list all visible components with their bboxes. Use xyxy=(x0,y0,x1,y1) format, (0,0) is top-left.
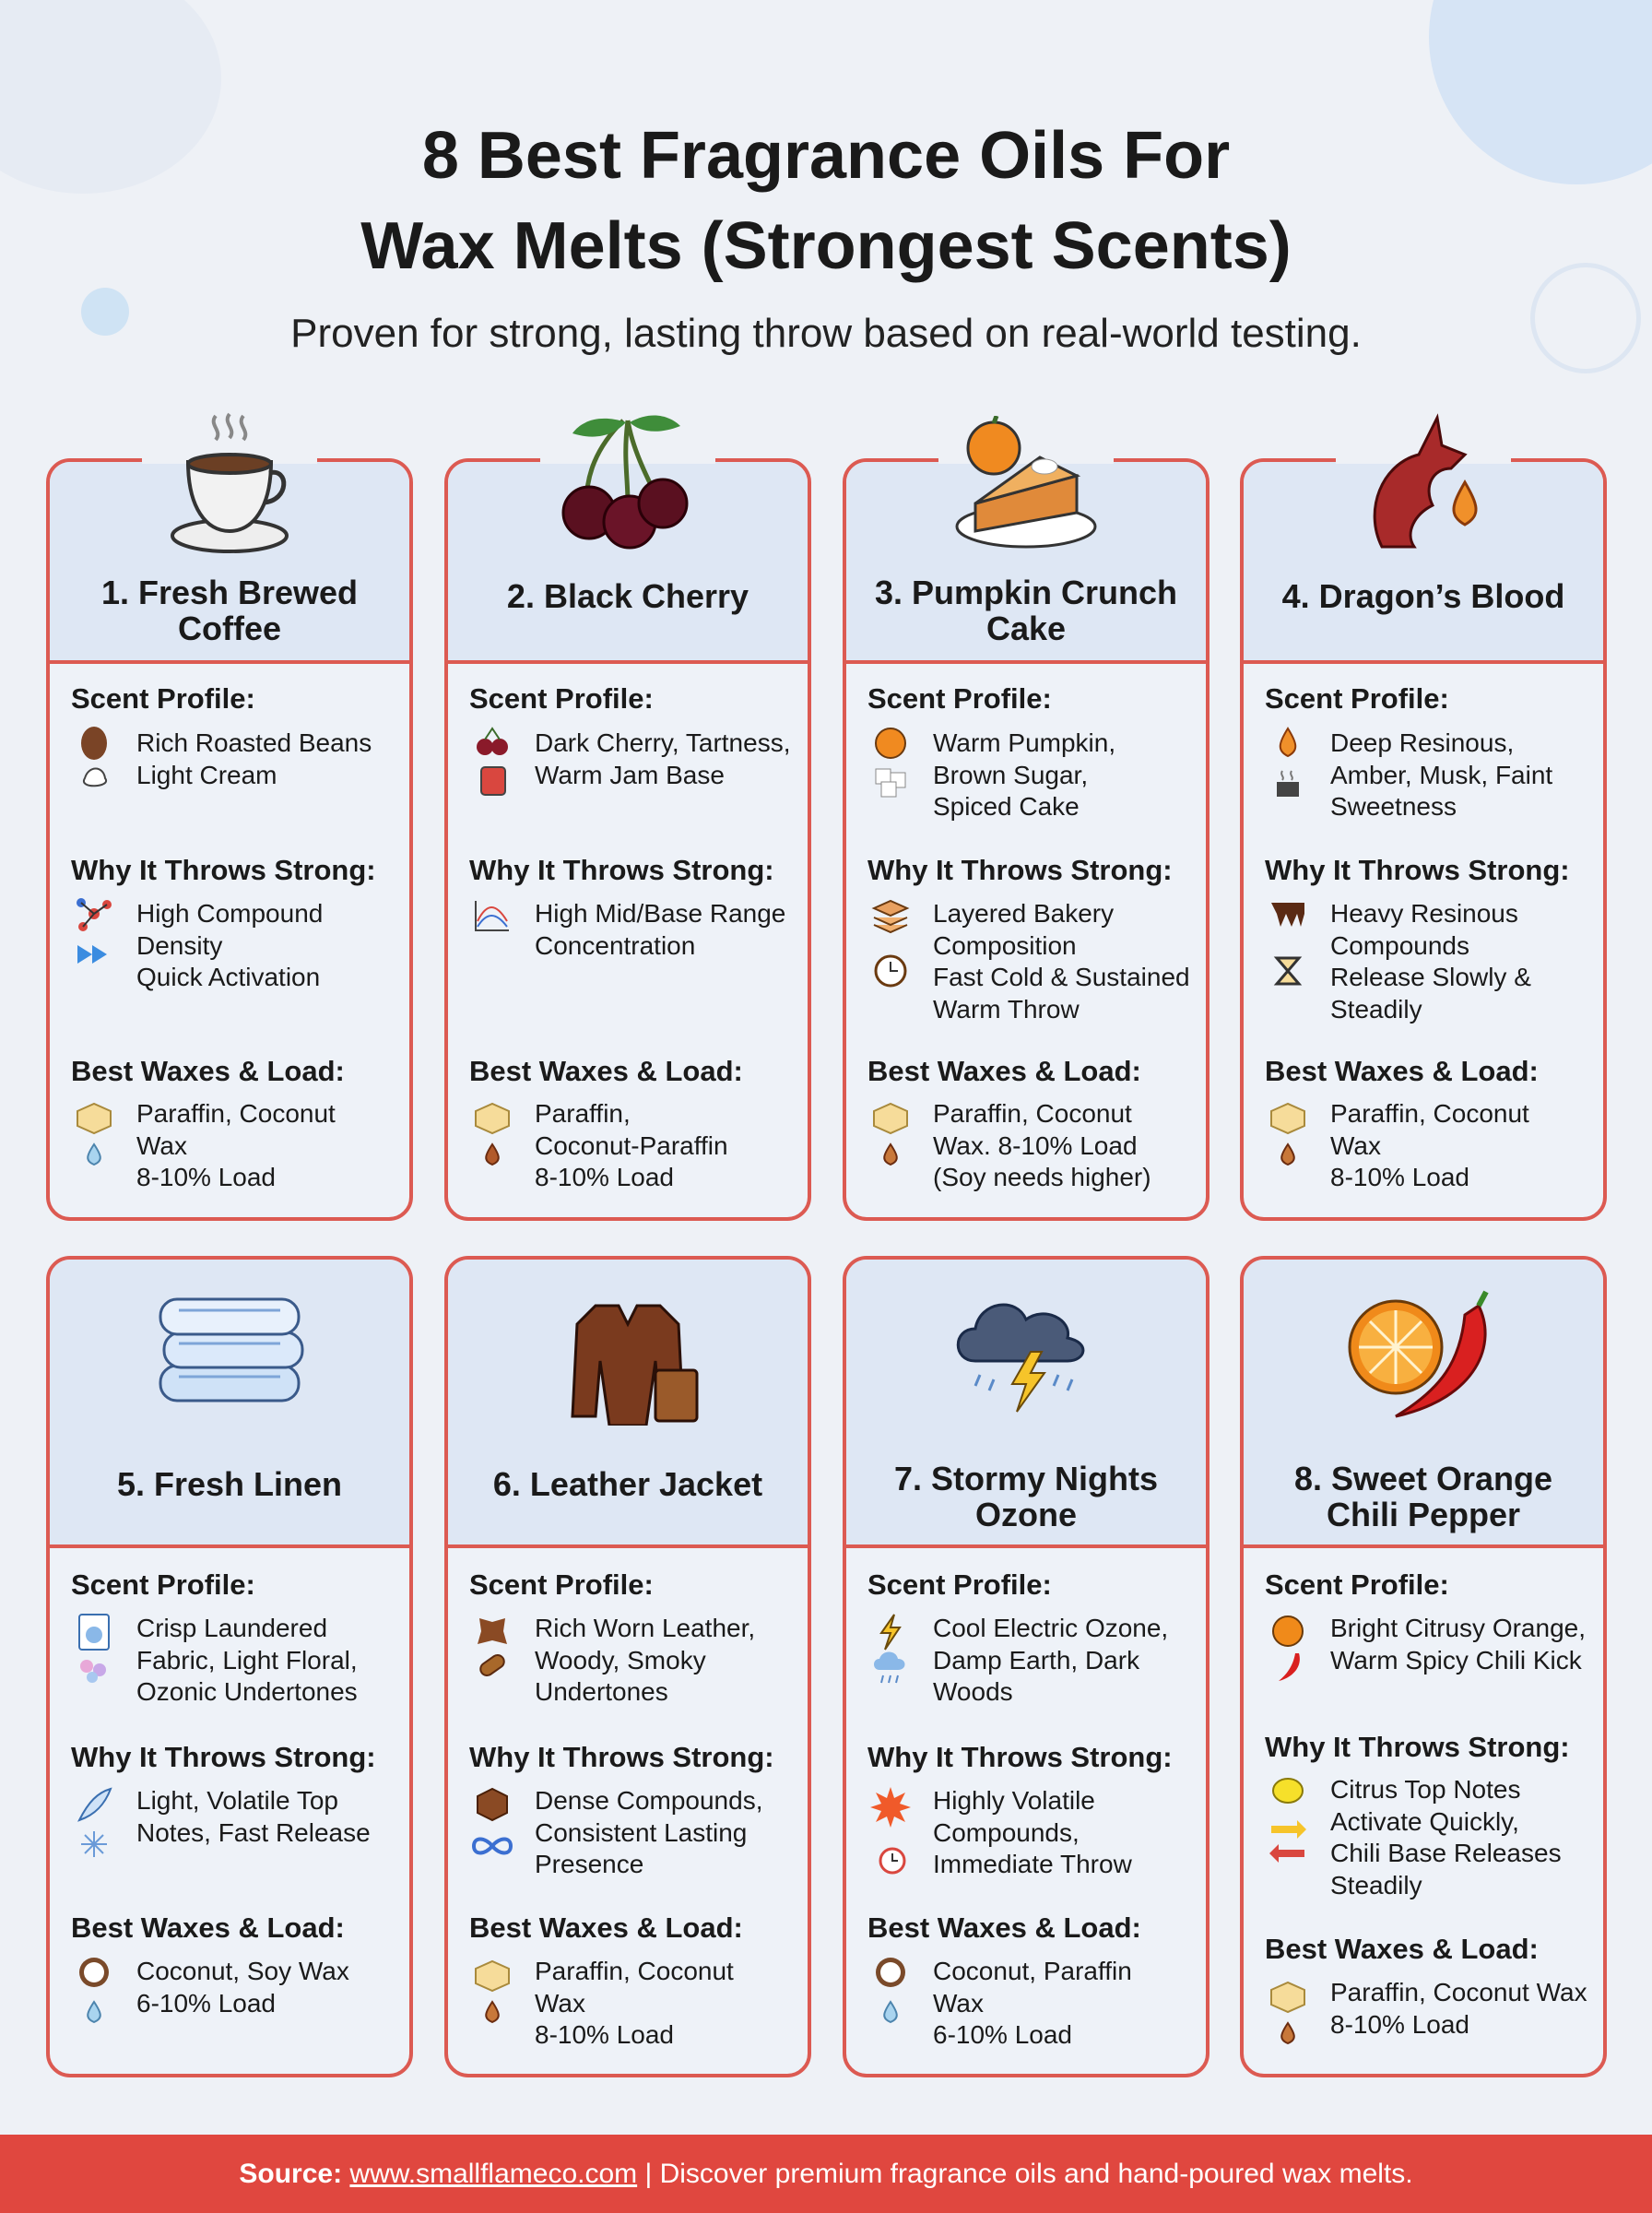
why it throws: Why It Throws Strong: xyxy=(1265,1731,1570,1763)
card 2: black cherry: Coconut-Paraffin xyxy=(535,1130,728,1160)
card 6: leather jacket: Undertones xyxy=(535,1677,668,1706)
title: Cake xyxy=(986,609,1066,647)
icon: cherries xyxy=(562,415,688,550)
card 7: stormy nights: Immediate Throw xyxy=(933,1850,1132,1878)
icon: storm cloud xyxy=(957,1304,1084,1413)
card 1: coffee: Quick Activation xyxy=(136,963,320,991)
why it throws: Why It Throws Strong: xyxy=(1265,854,1570,886)
footer source bar: Source: www.smallflameco.com | Discover premium fragrance oils and hand-poured wax melts. xyxy=(239,2159,1413,2189)
why it throws: Why It Throws Strong: xyxy=(469,854,774,886)
best waxes: Best Waxes & Load: xyxy=(867,1055,1141,1087)
footer source bar xyxy=(0,2135,1652,2213)
card 7: stormy nights: Woods xyxy=(933,1677,1013,1706)
card 4: dragon's blood: Compounds xyxy=(1330,931,1469,959)
card 4: dragon's blood: Steadily xyxy=(1330,994,1422,1024)
icon: leather jacket xyxy=(571,1304,699,1426)
card 4: dragon's blood: Deep Resinous, xyxy=(1330,728,1514,757)
card 3: pumpkin xyxy=(843,458,1210,1221)
card 8: sweet orange chili pepper: Bright Citrusy Orange, xyxy=(1330,1614,1586,1642)
card 1: coffee: Light Cream xyxy=(136,760,277,789)
card 5: fresh linen: Ozonic Undertones xyxy=(136,1677,358,1706)
scent profile: Scent Profile: xyxy=(469,1568,654,1601)
title: 5. Fresh Linen xyxy=(117,1465,342,1503)
card 1: coffee: Paraffin, Coconut xyxy=(136,1099,336,1128)
card 2: black cherry: Dark Cherry, Tartness, xyxy=(535,728,790,757)
why it throws: Why It Throws Strong: xyxy=(71,854,376,886)
scent profile: Scent Profile: xyxy=(1265,1568,1449,1601)
card 3: pumpkin: Warm Throw xyxy=(933,994,1080,1024)
title: 2. Black Cherry xyxy=(507,577,749,615)
title xyxy=(894,1460,1158,1533)
scent profile: Scent Profile: xyxy=(867,1568,1052,1601)
card 8: sweet orange chili pepper: Activate Quickly, xyxy=(1330,1807,1519,1835)
card 3: pumpkin: Warm Pumpkin, xyxy=(933,728,1115,757)
card 1: coffee: Rich Roasted Beans xyxy=(136,728,372,757)
card 5: fresh linen xyxy=(46,1256,413,2077)
card 1: coffee: 8-10% Load xyxy=(136,1163,276,1191)
card 5: fresh linen: Light, Volatile Top xyxy=(136,1786,338,1815)
card 7: stormy nights: Wax xyxy=(933,1988,984,2018)
card 6: leather jacket: Dense Compounds, xyxy=(535,1786,762,1815)
card 4: dragon's blood: 8-10% Load xyxy=(1330,1163,1469,1191)
title xyxy=(875,574,1177,647)
card 5: fresh linen: Fabric, Light Floral, xyxy=(136,1645,358,1675)
card 8: sweet orange chili pepper: Steadily xyxy=(1330,1870,1422,1899)
card 7: stormy nights: Highly Volatile xyxy=(933,1786,1095,1815)
card 5: fresh linen: Coconut, Soy Wax xyxy=(136,1957,349,1985)
card 5: fresh linen: Crisp Laundered xyxy=(136,1614,327,1642)
card 8: sweet orange chili pepper: 8-10% Load xyxy=(1330,2010,1469,2038)
card 3: pumpkin: Paraffin, Coconut xyxy=(933,1099,1132,1128)
card 4: dragon's blood: Heavy Resinous xyxy=(1330,899,1518,928)
why it throws: Why It Throws Strong: xyxy=(469,1741,774,1773)
best waxes: Best Waxes & Load: xyxy=(469,1055,743,1087)
title: 7. Stormy Nights xyxy=(894,1460,1158,1497)
card 3: pumpkin: Wax. 8-10% Load xyxy=(933,1130,1138,1160)
card 4: dragon's blood xyxy=(1240,458,1607,1221)
card 6: leather jacket: Consistent Lasting xyxy=(535,1818,747,1846)
card 2: black cherry: Paraffin, xyxy=(535,1099,631,1128)
card 7: stormy nights: 6-10% Load xyxy=(933,2020,1072,2049)
why it throws: Why It Throws Strong: xyxy=(867,1741,1173,1773)
card 5: fresh linen: Notes, Fast Release xyxy=(136,1818,371,1846)
best waxes: Best Waxes & Load: xyxy=(469,1911,743,1944)
card 8: sweet orange chili pepper: Citrus Top Notes xyxy=(1330,1775,1520,1804)
title: Coffee xyxy=(178,609,281,647)
card 3: pumpkin: Brown Sugar, xyxy=(933,760,1088,789)
subtitle: Proven for strong, lasting throw based on real-world testing. xyxy=(290,311,1362,356)
scent profile: Scent Profile: xyxy=(1265,682,1449,715)
card 4: dragon's blood: Paraffin, Coconut xyxy=(1330,1099,1529,1128)
card 6: leather jacket: Rich Worn Leather, xyxy=(535,1614,755,1642)
card 1: coffee: High Compound xyxy=(136,899,323,928)
title xyxy=(1294,1460,1552,1533)
card 2: black cherry: Concentration xyxy=(535,931,695,959)
icon: dragon and drop xyxy=(1374,413,1477,548)
scent profile: Scent Profile: xyxy=(867,682,1052,715)
card 6: leather jacket: Wax xyxy=(535,1988,585,2018)
card 8: sweet orange chili pepper: Chili Base Releases xyxy=(1330,1839,1562,1867)
icon: coffee cup xyxy=(171,413,289,553)
best waxes: Best Waxes & Load: xyxy=(71,1055,345,1087)
card 7: stormy nights: Coconut, Paraffin xyxy=(933,1957,1132,1985)
card 7: stormy nights: Cool Electric Ozone, xyxy=(933,1614,1168,1642)
card 2: black cherry: High Mid/Base Range xyxy=(535,899,785,928)
card 3: pumpkin: (Soy needs higher) xyxy=(933,1163,1151,1191)
title: 4. Dragon’s Blood xyxy=(1282,577,1564,615)
title: 8. Sweet Orange xyxy=(1294,1460,1552,1497)
card 7: stormy nights: Damp Earth, Dark xyxy=(933,1645,1139,1675)
card 6: leather jacket: Paraffin, Coconut xyxy=(535,1957,734,1985)
card 1: coffee: Wax xyxy=(136,1130,187,1160)
title: 3. Pumpkin Crunch xyxy=(875,574,1177,611)
card 2: black cherry: Warm Jam Base xyxy=(535,760,725,789)
card 4: dragon's blood: Sweetness xyxy=(1330,792,1457,821)
icon: towels xyxy=(159,1298,304,1402)
card 4: dragon's blood: Wax xyxy=(1330,1130,1381,1160)
title: Ozone xyxy=(975,1496,1077,1533)
background decorations xyxy=(81,0,1652,373)
card 6: leather jacket: Presence xyxy=(535,1850,643,1878)
title: Wax Melts (Strongest Scents) xyxy=(360,209,1292,283)
card 6: leather jacket xyxy=(444,1256,811,2077)
card 1: coffee: Density xyxy=(136,931,222,959)
card 4: dragon's blood: Release Slowly & xyxy=(1330,963,1531,991)
best waxes: Best Waxes & Load: xyxy=(1265,1933,1539,1965)
best waxes: Best Waxes & Load: xyxy=(1265,1055,1539,1087)
title: 6. Leather Jacket xyxy=(493,1465,762,1503)
card 7: stormy nights xyxy=(843,1256,1210,2077)
card 3: pumpkin: Composition xyxy=(933,931,1077,959)
title xyxy=(101,574,358,647)
scent profile: Scent Profile: xyxy=(71,1568,255,1601)
card 8: sweet orange chili pepper xyxy=(1240,1256,1607,2077)
card 2: black cherry xyxy=(444,458,811,1221)
icon: pumpkin cake xyxy=(955,416,1097,548)
why it throws: Why It Throws Strong: xyxy=(71,1741,376,1773)
scent profile: Scent Profile: xyxy=(71,682,255,715)
card 7: stormy nights: Compounds, xyxy=(933,1818,1080,1846)
icon: orange and chili xyxy=(1348,1291,1489,1418)
card 3: pumpkin: Fast Cold & Sustained xyxy=(933,963,1190,991)
card 3: pumpkin: Spiced Cake xyxy=(933,792,1080,821)
card 8: sweet orange chili pepper: Warm Spicy Chili Kick xyxy=(1330,1645,1582,1675)
card 5: fresh linen: 6-10% Load xyxy=(136,1988,276,2018)
why it throws: Why It Throws Strong: xyxy=(867,854,1173,886)
title: Chili Pepper xyxy=(1327,1496,1520,1533)
best waxes: Best Waxes & Load: xyxy=(867,1911,1141,1944)
title xyxy=(360,119,1292,283)
card 3: pumpkin: Layered Bakery xyxy=(933,899,1114,928)
card 8: sweet orange chili pepper: Paraffin, Coconut Wax xyxy=(1330,1978,1587,2006)
card 6: leather jacket: Woody, Smoky xyxy=(535,1645,706,1675)
card 1: coffee xyxy=(46,458,413,1221)
scent profile: Scent Profile: xyxy=(469,682,654,715)
card 4: dragon's blood: Amber, Musk, Faint xyxy=(1330,760,1552,789)
title: 1. Fresh Brewed xyxy=(101,574,358,611)
best waxes: Best Waxes & Load: xyxy=(71,1911,345,1944)
card 2: black cherry: 8-10% Load xyxy=(535,1163,674,1191)
title: 8 Best Fragrance Oils For xyxy=(422,119,1230,193)
card 6: leather jacket: 8-10% Load xyxy=(535,2020,674,2049)
